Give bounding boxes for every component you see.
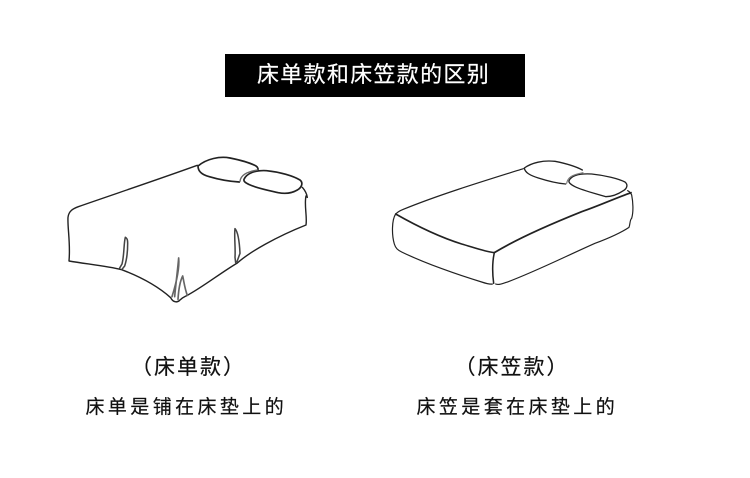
pillow overlap xyxy=(240,170,257,181)
center fold xyxy=(172,258,187,299)
left heading: （床单款） xyxy=(131,356,246,379)
illustration: flat sheet bed xyxy=(68,157,307,302)
left pillow xyxy=(198,157,258,182)
left pillow xyxy=(524,161,582,184)
mattress front-right top edge xyxy=(494,193,631,253)
mattress right side xyxy=(496,191,633,284)
right fold xyxy=(235,229,240,263)
right pillow xyxy=(569,174,627,197)
mattress top edge xyxy=(396,169,523,214)
right caption: 床笠是套在床垫上的 xyxy=(416,396,618,418)
left caption: 床单是铺在床垫上的 xyxy=(86,396,287,418)
mattress front-left top edge xyxy=(396,214,494,253)
illustration: fitted sheet bed xyxy=(392,161,633,284)
title banner xyxy=(225,54,525,97)
title text: 床单款和床笠款的区别 xyxy=(257,62,490,87)
mattress left side xyxy=(392,214,492,284)
bed sheet outline xyxy=(68,165,307,302)
left fold xyxy=(120,237,128,269)
pillow overlap xyxy=(567,173,583,183)
right pillow xyxy=(244,171,302,193)
mattress corner xyxy=(493,253,494,283)
right heading: （床笠款） xyxy=(454,356,570,379)
